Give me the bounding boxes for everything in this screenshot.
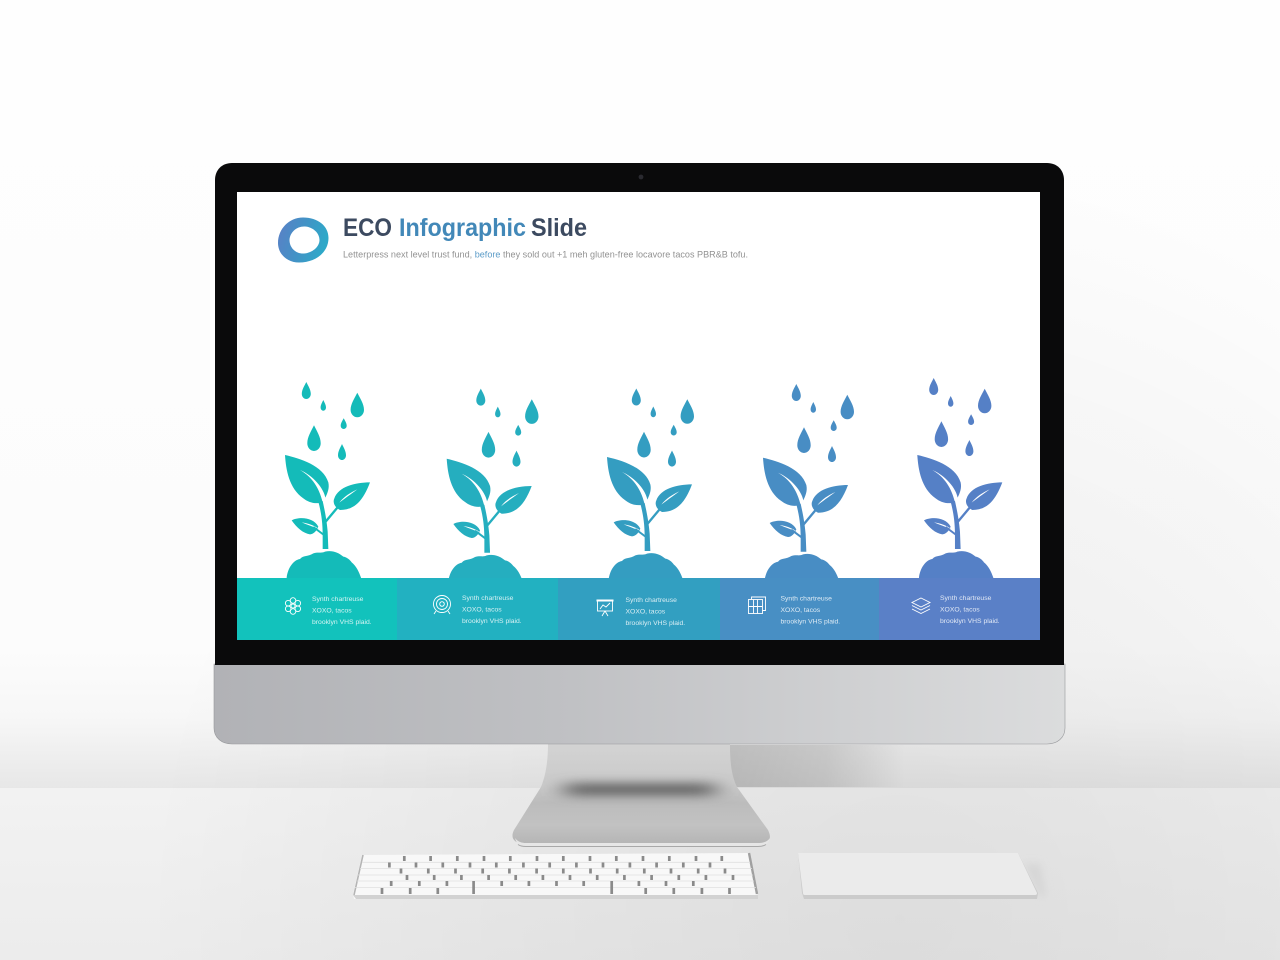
monitor bezel bbox=[215, 163, 1064, 665]
text: panel 3 bbox=[626, 597, 685, 627]
rain drops 3 bbox=[632, 388, 694, 466]
icon: atom flower bbox=[285, 598, 301, 614]
monitor chin bbox=[214, 664, 1065, 744]
text: panel 5 bbox=[940, 595, 1000, 625]
logo ring bbox=[278, 218, 328, 262]
band panel 5 bbox=[879, 578, 1040, 640]
rain drops 2 bbox=[476, 389, 538, 467]
text: panel 3: brooklyn VHS plaid. bbox=[626, 620, 685, 627]
rain drops 5 bbox=[929, 378, 991, 456]
subtitle: Letterpress next level trust fund, before they sold out +1 meh gluten-free locavore tacos PBR&B tofu. bbox=[343, 250, 748, 260]
text: panel 2 bbox=[462, 595, 522, 625]
desk surface bbox=[0, 788, 1280, 960]
keyboard bbox=[353, 853, 758, 899]
band panel 3 bbox=[558, 578, 720, 640]
text: panel 1: brooklyn VHS plaid. bbox=[312, 619, 372, 626]
band panel 2 bbox=[397, 578, 558, 640]
plant column 2 bbox=[447, 389, 538, 590]
title: ECO bbox=[343, 214, 392, 242]
camera bbox=[639, 175, 643, 179]
text: panel 5: brooklyn VHS plaid. bbox=[940, 618, 1000, 625]
seedling 3 bbox=[607, 457, 692, 589]
text: panel 2: Synth chartreuse bbox=[462, 595, 514, 602]
plant column 1 bbox=[285, 382, 370, 587]
icon: presentation board bbox=[596, 600, 614, 616]
text: panel 4: brooklyn VHS plaid. bbox=[780, 618, 840, 626]
text: panel 1: XOXO, tacos bbox=[312, 608, 352, 614]
text: panel 5: Synth chartreuse bbox=[940, 595, 992, 602]
text: panel 1: Synth chartreuse bbox=[312, 596, 364, 603]
screen bbox=[237, 192, 1040, 640]
title bbox=[343, 214, 587, 242]
text: panel 3: XOXO, tacos bbox=[626, 608, 666, 616]
band panel 4 bbox=[720, 578, 879, 640]
text: panel 2: brooklyn VHS plaid. bbox=[462, 618, 522, 625]
icon: film squares bbox=[748, 597, 766, 614]
plant column 5 bbox=[917, 378, 1002, 587]
plant column 4 bbox=[763, 384, 854, 589]
seedling 1 bbox=[285, 455, 370, 587]
icon: layer stack bbox=[912, 598, 930, 614]
stand shadow on wall bbox=[730, 745, 905, 787]
text: panel 1 bbox=[312, 596, 372, 626]
text: panel 4: XOXO, tacos bbox=[780, 607, 821, 614]
text: panel 2: XOXO, tacos bbox=[462, 606, 502, 614]
band panel 1 bbox=[237, 578, 397, 640]
trackpad bbox=[798, 853, 1046, 899]
monitor bbox=[214, 163, 1065, 744]
title: Slide bbox=[531, 214, 587, 242]
seedling 4 bbox=[763, 458, 848, 589]
seedling 2 bbox=[447, 459, 532, 590]
icon: target bbox=[434, 596, 450, 614]
plant column 3 bbox=[607, 388, 694, 589]
monitor stand bbox=[512, 744, 770, 846]
text: panel 4 bbox=[780, 596, 840, 626]
text: panel 4: Synth chartreuse bbox=[780, 596, 832, 602]
trackpad shadow bbox=[1024, 864, 1046, 897]
text: panel 3: Synth chartreuse bbox=[626, 597, 677, 604]
seedling 5 bbox=[917, 455, 1002, 587]
rain drops 4 bbox=[792, 384, 854, 462]
title: Infographic bbox=[399, 214, 526, 242]
text: panel 5: XOXO, tacos bbox=[940, 606, 980, 614]
rain drops 1 bbox=[302, 382, 364, 460]
